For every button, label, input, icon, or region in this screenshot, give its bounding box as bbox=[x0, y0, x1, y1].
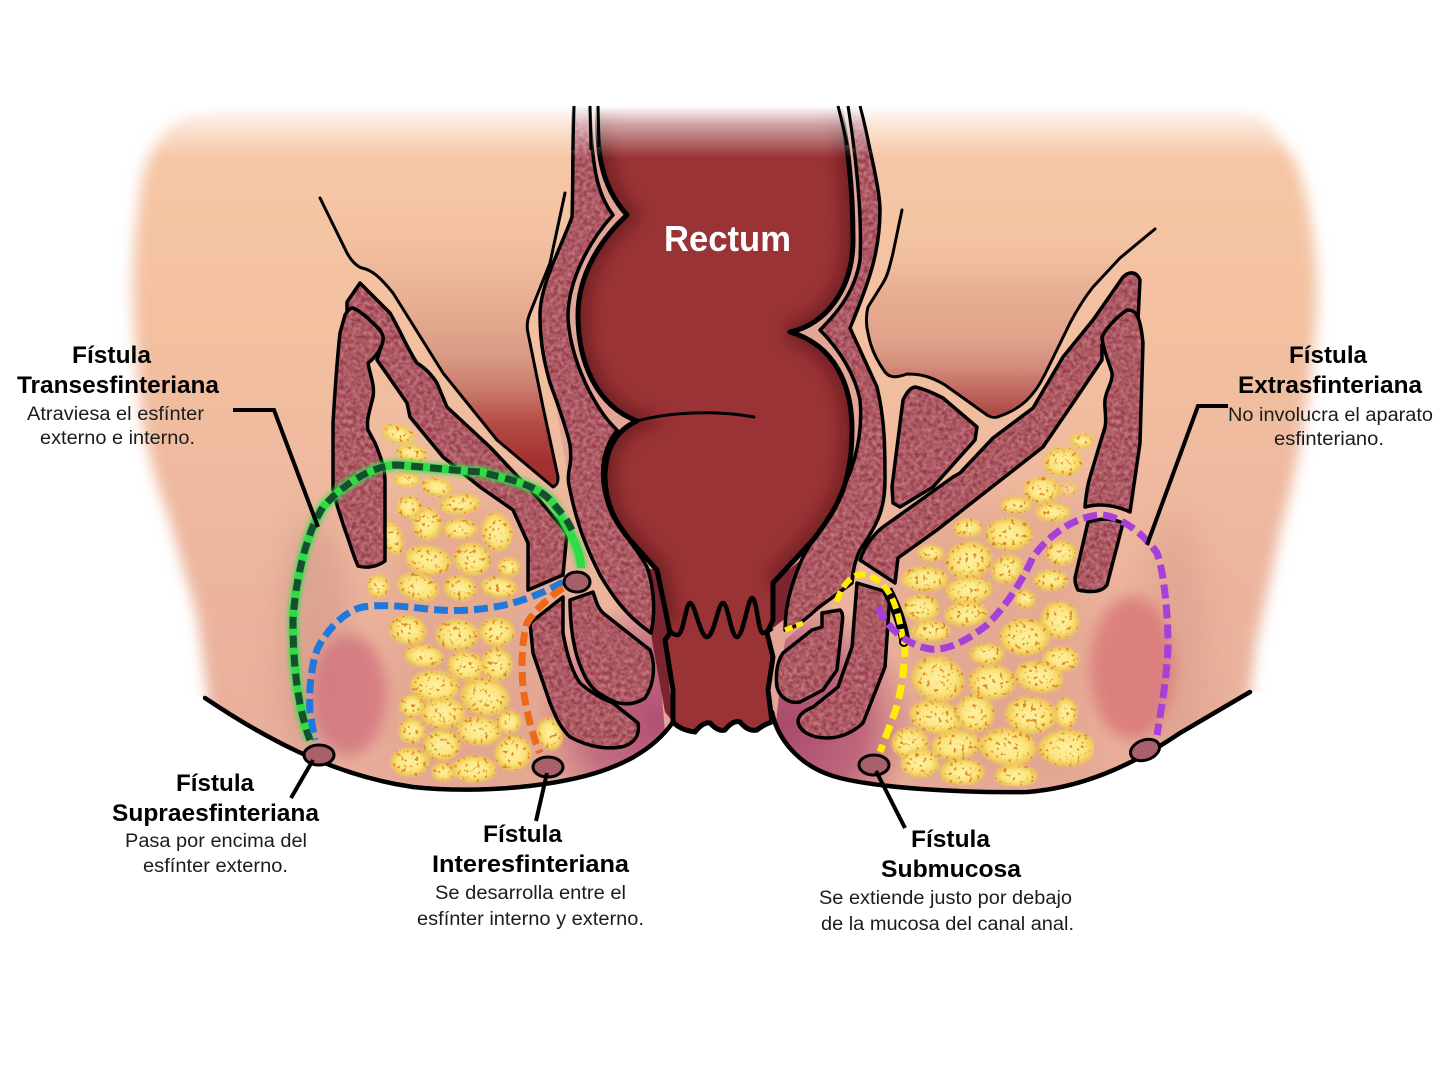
pelvic cavity shading right bbox=[868, 210, 1155, 416]
fistula: extrasfinteriana (purple) bbox=[878, 515, 1168, 735]
white area above the body bbox=[0, 0, 1448, 106]
label: Fístula Extrasfinteriana: Fístula bbox=[1289, 342, 1368, 369]
label: Fístula Submucosa: Fístula bbox=[911, 826, 991, 853]
label: Fístula Submucosa: de la mucosa del canal anal. bbox=[821, 914, 1074, 935]
skin opening: extrasfinteriana bbox=[1127, 735, 1163, 765]
body lower outline right bbox=[772, 692, 1250, 792]
label: Fístula Submucosa bbox=[819, 826, 1074, 935]
rectal wall lines above fade bbox=[573, 106, 870, 150]
dark strips beside the anal canal bbox=[642, 558, 803, 722]
fistula: supraesfinteriana (blue) bbox=[310, 582, 563, 740]
label: Fístula Transesfinteriana: externo e interno. bbox=[40, 428, 195, 449]
muscle: right external sphincter superficial bbox=[798, 583, 890, 738]
label: Fístula Transesfinteriana: Fístula bbox=[72, 342, 152, 369]
label: Fístula Supraesfinteriana: Pasa por encima del bbox=[125, 831, 307, 852]
muscle: left obturator bbox=[333, 308, 385, 567]
fistula: submucosa (yellow) bbox=[785, 575, 908, 752]
top fade bbox=[0, 106, 1448, 158]
leader: supraesfinteriana bbox=[291, 760, 313, 798]
white area below the body bbox=[0, 692, 1448, 1086]
leader: transesfinteriana bbox=[233, 410, 318, 527]
label: Fístula Interesfinteriana: Fístula bbox=[483, 821, 563, 848]
rectum lumen bbox=[578, 100, 853, 732]
anatomical outline left bbox=[320, 193, 565, 487]
label: Fístula Extrasfinteriana: No involucra el aparato bbox=[1228, 405, 1433, 426]
leader: extrasfinteriana bbox=[1147, 406, 1228, 545]
muscle: left levator bbox=[347, 283, 567, 590]
label: Fístula Supraesfinteriana: esfínter externo. bbox=[143, 856, 288, 877]
muscle: right external sphincter deep bbox=[776, 610, 843, 702]
skin opening: supraesfinteriana bbox=[304, 745, 334, 765]
anatomical outline right bbox=[866, 210, 1155, 417]
rectal fold line bbox=[637, 413, 754, 421]
fistula: interesfinteriana (orange) bbox=[522, 588, 563, 753]
label: Fístula Supraesfinteriana bbox=[112, 770, 320, 877]
label: Fístula Transesfinteriana bbox=[17, 342, 220, 449]
muscle: right rectal wall bbox=[785, 105, 885, 630]
label: Fístula Submucosa: Submucosa bbox=[881, 856, 1022, 883]
skin opening: submucosa bbox=[859, 755, 889, 775]
fistula: transesfinteriana (green) bbox=[293, 465, 581, 740]
label: Fístula Interesfinteriana: esfínter interno y externo. bbox=[417, 909, 644, 930]
label: Fístula Extrasfinteriana: Extrasfinteriana bbox=[1238, 372, 1423, 399]
pelvic cavity shading left bbox=[320, 193, 565, 487]
label: Fístula Transesfinteriana: Atraviesa el esfínter bbox=[27, 404, 205, 425]
muscle: right obturator bbox=[1075, 310, 1143, 592]
rectal wall mucosa band bbox=[540, 100, 885, 732]
label: Fístula Submucosa: Se extiende justo por debajo bbox=[819, 888, 1072, 909]
body lower outline left bbox=[205, 698, 673, 790]
fat globules bbox=[368, 422, 1094, 786]
label: Fístula Transesfinteriana: Transesfinteriana bbox=[17, 372, 220, 399]
label: Fístula Supraesfinteriana: Fístula bbox=[176, 770, 255, 797]
leader: submucosa bbox=[876, 771, 905, 828]
body silhouette bbox=[133, 95, 1317, 830]
leader: interesfinteriana bbox=[536, 773, 547, 821]
muscle: right coccygeal triangle bbox=[892, 387, 977, 507]
ischioanal pink areas bbox=[311, 595, 1174, 855]
internal fistula opening bbox=[564, 572, 590, 592]
skin opening: interesfinteriana bbox=[533, 757, 563, 777]
muscle: left external sphincter deep bbox=[570, 592, 653, 704]
muscle: right levator bbox=[860, 273, 1140, 583]
label: Fístula Interesfinteriana: Interesfinteriana bbox=[432, 851, 630, 878]
medial shading of the flanks bbox=[281, 500, 1209, 790]
muscle: left rectal wall bbox=[540, 105, 654, 633]
label: Rectum: Rectum bbox=[664, 218, 791, 259]
label: Fístula Extrasfinteriana bbox=[1228, 342, 1433, 450]
label: Fístula Extrasfinteriana: esfinteriano. bbox=[1274, 429, 1384, 450]
label: Fístula Interesfinteriana bbox=[417, 821, 644, 930]
dentate line bbox=[668, 598, 772, 637]
muscle: left external sphincter superficial bbox=[530, 597, 638, 748]
anal verge outline bbox=[673, 722, 772, 732]
label: Fístula Supraesfinteriana: Supraesfinteriana bbox=[112, 800, 320, 827]
label: Fístula Interesfinteriana: Se desarrolla entre el bbox=[435, 883, 626, 904]
